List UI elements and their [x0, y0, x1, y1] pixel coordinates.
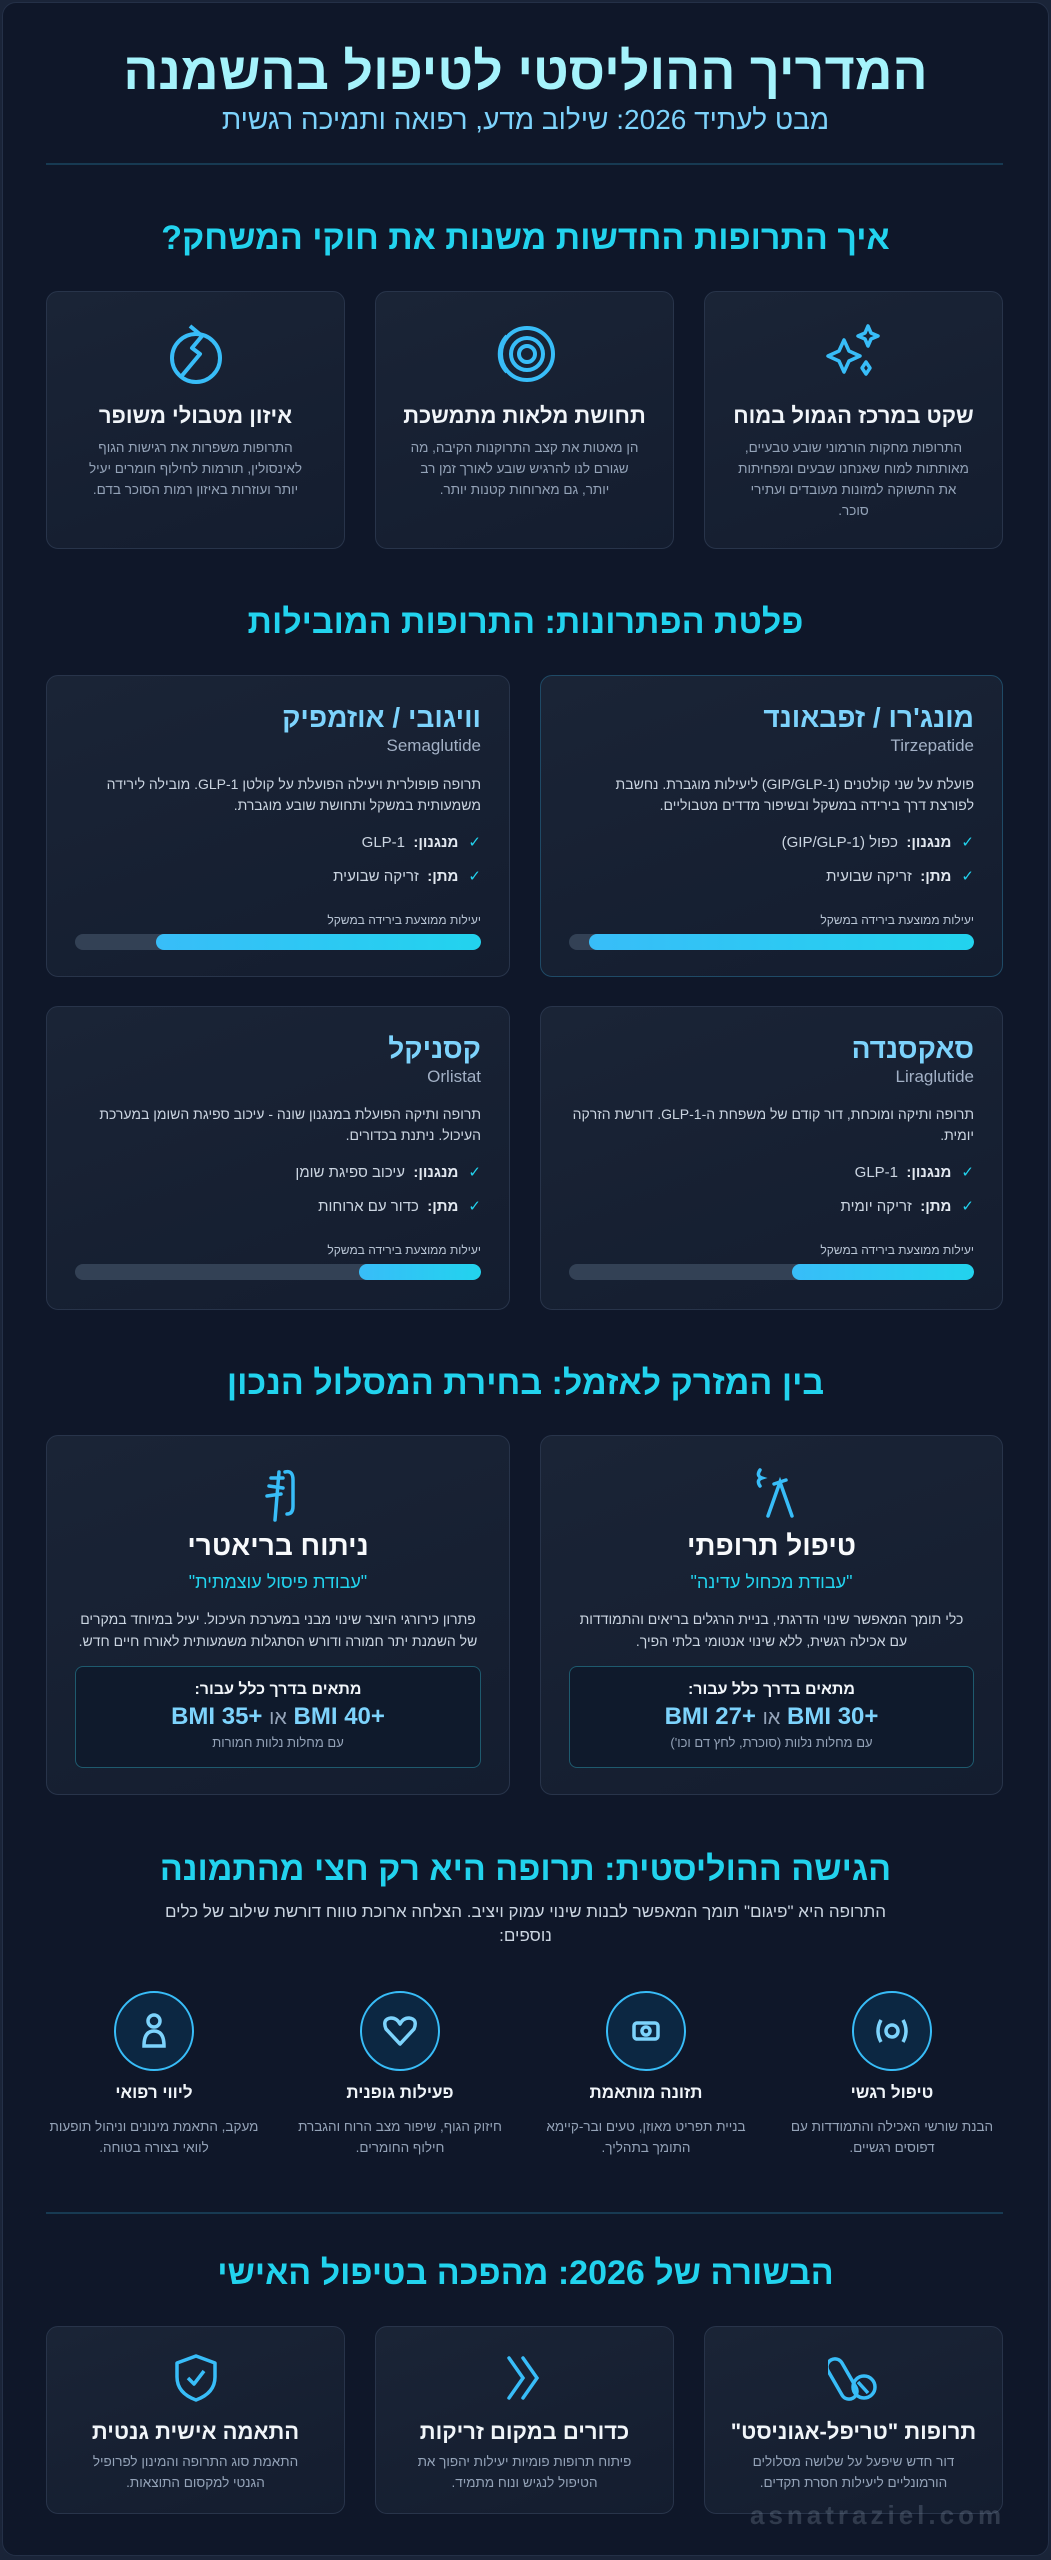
- drug card: Tirzepatide: Tirzepatide: [891, 736, 974, 755]
- drug card: Tirzepatide: [540, 675, 1003, 977]
- drug card: Tirzepatide: ✓מתן: זריקה שבועית: [826, 868, 974, 885]
- card: satiety: הן מאטות את קצב התרוקנות הקיבה, מה שגורם לנו להרגיש שובע לאורך זמן רב יותר, גם מארוחות קטנות יותר.: [411, 440, 638, 497]
- text block: intro: התרופה היא "פיגום" תומך המאפשר לבנות שינוי עמוק ויציב. הצלחה ארוכת טווח דורשת שילוב של כלים נוספים:: [165, 1902, 886, 1945]
- card: genetic personalization: התאמה אישית גנטית: [92, 2419, 299, 2444]
- callout: BMI box: מתאים בדרך כלל עבור:: [194, 1681, 362, 1698]
- card: satiety: תחושת מלאות מתמשכת: [403, 403, 646, 428]
- drug card: Semaglutide: יעילות ממוצעת בירידה במשקל: [327, 913, 481, 927]
- pillar: emotional therapy: הבנת שורשי האכילה והתמודדות עם דפוסים רגשיים.: [791, 2119, 993, 2155]
- pillar: nutrition: [546, 1991, 746, 2155]
- card: reward center: [704, 291, 1003, 549]
- drug card: Liraglutide: תרופה ותיקה ומוכחת, דור קודם של משפחת ה-GLP-1. דורשת הזרקה יומית.: [573, 1106, 974, 1143]
- bar: efficacy 95%: [569, 934, 974, 950]
- heading: holistic approach: הגישה ההוליסטית: תרופה היא רק חצי מהתמונה: [160, 1850, 891, 1888]
- drug card: Liraglutide: ✓מתן: זריקה יומית: [841, 1198, 974, 1215]
- card: drug treatment: כלי תומך המאפשר שינוי הדרגתי, בניית הרגלים בריאים והתמודדות עם אכילה רגשית, ללא שינוי אנטומי בלתי הפיך.: [580, 1611, 963, 1649]
- card: pills instead of injections: כדורים במקום זריקות: [420, 2419, 629, 2444]
- panel: treatment paths: [46, 1435, 1003, 1795]
- panel: future cards: [46, 2326, 1003, 2514]
- card: drug treatment: "עבודת מכחול עדינה": [690, 1572, 852, 1592]
- callout: BMI box: [75, 1666, 481, 1768]
- callout: BMI box: עם מחלות נלוות (סוכרת, לחץ דם וכו'): [670, 1735, 873, 1750]
- card: metabolic balance: איזון מטבולי משופר: [99, 403, 292, 428]
- callout: BMI box: BMI 40+ או BMI 35+: [171, 1703, 385, 1730]
- panel: drug cards: [46, 675, 1003, 1310]
- callout: BMI box: BMI 30+ או BMI 27+: [665, 1703, 878, 1730]
- pillar: physical activity: פעילות גופנית: [346, 2083, 454, 2102]
- drug card: Tirzepatide: פועלת על שני קולטנים (GIP/GLP-1) ליעילות מוגברת. נחשבת לפורצת דרך בירידה במשקל ובשיפור מדדים מטבוליים.: [616, 776, 974, 813]
- icon: syringe: [756, 1468, 794, 1518]
- title: המדריך ההוליסטי לטיפול בהשמנה: [123, 43, 928, 101]
- card: genetic personalization: התאמת סוג התרופה והמינון לפרופיל הגנטי למקסום התוצאות.: [93, 2454, 298, 2490]
- watermark: asnatraziel.com: [750, 2500, 1005, 2530]
- drug card: Orlistat: יעילות ממוצעת בירידה במשקל: [327, 1243, 481, 1257]
- icon: scalpel: [265, 1470, 295, 1522]
- icon: sparkles: [826, 324, 880, 376]
- callout: BMI box: [569, 1666, 974, 1768]
- card: genetic personalization: [46, 2326, 345, 2514]
- drug card: Liraglutide: יעילות ממוצעת בירידה במשקל: [820, 1243, 974, 1257]
- card: bariatric surgery: ניתוח בריאטרי: [187, 1530, 369, 1561]
- card: reward center: התרופות מחקות הורמוני שובע טבעיים, מאותתות למוח שאנחנו שבעים ומפחיתות את התשוקה למזונות מעובדים ועתירי סוכר.: [738, 440, 969, 518]
- pillar: medical follow-up: מעקב, התאמת מינונים וניהול תופעות לוואי בצורה בטוחה.: [50, 2119, 258, 2155]
- drug card: Semaglutide: ✓מתן: זריקה שבועית: [333, 868, 481, 885]
- callout: BMI box: מתאים בדרך כלל עבור:: [688, 1681, 855, 1698]
- drug card: Tirzepatide: מונג'רו / זפבאונד: [763, 702, 974, 733]
- card: triple agonist: תרופות "טריפל-אגוניסט": [731, 2419, 976, 2444]
- bar: efficacy 30%: [75, 1264, 481, 1280]
- card: drug treatment: [540, 1435, 1003, 1795]
- panel: three mechanism cards: [46, 291, 1003, 549]
- drug card: Tirzepatide: ✓מנגנון: כפול (GIP/GLP-1): [782, 834, 974, 851]
- pillar: nutrition: בניית תפריט מאוזן, טעים ובר-קיימא התומך בתהליך.: [546, 2119, 746, 2155]
- panel: holistic pillars: [50, 1991, 993, 2155]
- heading: leading drugs: פלטת הפתרונות: התרופות המובילות: [248, 603, 803, 641]
- bar: efficacy 45%: [569, 1264, 974, 1280]
- drug card: Liraglutide: [540, 1006, 1003, 1310]
- drug card: Orlistat: ✓מנגנון: עיכוב ספיגת שומן: [295, 1164, 481, 1181]
- drug card: Semaglutide: [46, 675, 510, 977]
- drug card: Orlistat: Orlistat: [427, 1067, 481, 1086]
- pillar: nutrition: תזונה מותאמת: [590, 2083, 702, 2102]
- heading: 2026 news: הבשורה של 2026: מהפכה בטיפול האישי: [217, 2254, 834, 2292]
- drug card: Liraglutide: Liraglutide: [896, 1067, 974, 1086]
- pillar: emotional therapy: [791, 1991, 993, 2155]
- drug card: Semaglutide: וויגובי / אוזמפיק: [282, 702, 481, 733]
- icon: double chevron: [507, 2356, 540, 2400]
- card: bariatric surgery: פתרון כירורגי היוצר שינוי מבני במערכת העיכול. יעיל במיוחד במקרים של השמנת יתר חמורה ודורש הסתגלות משמעותית לאורח חיים חדש.: [79, 1611, 477, 1649]
- bar: efficacy 80%: [75, 934, 481, 950]
- pillar: physical activity: [298, 1991, 502, 2155]
- drug card: Semaglutide: תרופה פופולרית ויעילה הפועלת על קולטן GLP-1. מובילה לירידה משמעותית במשקל ותחושת שובע מוגברת.: [107, 776, 481, 813]
- icon: shield check: [175, 2354, 217, 2402]
- icon: pill capsule: [828, 2357, 877, 2401]
- pillar: medical follow-up: [50, 1991, 258, 2155]
- heading: syringe vs scalpel: בין המזרק לאזמל: בחירת המסלול הנכון: [227, 1364, 824, 1402]
- drug card: Liraglutide: סאקסנדה: [852, 1033, 974, 1064]
- card: triple agonist: דור חדש שיפעל על שלושה מסלולים הורמונליים ליעילות חסרת תקדים.: [753, 2454, 954, 2490]
- card: drug treatment: טיפול תרופתי: [687, 1530, 856, 1561]
- pillar: physical activity: חיזוק הגוף, שיפור מצב הרוח והגברת חילוף החומרים.: [298, 2119, 502, 2155]
- drug card: Semaglutide: ✓מנגנון: GLP-1: [362, 834, 481, 851]
- drug card: Tirzepatide: יעילות ממוצעת בירידה במשקל: [820, 913, 974, 927]
- drug card: Orlistat: תרופה ותיקה הפועלת במנגנון שונה - עיכוב ספיגת השומן במערכת העיכול. ניתנת בכדורים.: [99, 1106, 481, 1143]
- pillar: medical follow-up: ליווי רפואי: [115, 2083, 193, 2102]
- heading: how drugs change the rules: איך התרופות החדשות משנות את חוקי המשחק?: [161, 219, 890, 257]
- drug card: Orlistat: קסניקל: [388, 1033, 481, 1064]
- card: pills instead of injections: [375, 2326, 674, 2514]
- card: reward center: שקט במרכז הגמול במוח: [733, 403, 974, 428]
- subtitle: מבט לעתיד 2026: שילוב מדע, רפואה ותמיכה רגשית: [222, 104, 829, 135]
- card: satiety: [375, 291, 674, 549]
- card: metabolic balance: התרופות משפרות את רגישות הגוף לאינסולין, תורמות לחילוף חומרים יעיל יותר ועוזרות באיזון רמות הסוכר בדם.: [89, 440, 302, 497]
- card: metabolic balance: [46, 291, 345, 549]
- drug card: Semaglutide: Semaglutide: [386, 736, 481, 755]
- pillar: emotional therapy: טיפול רגשי: [851, 2083, 933, 2102]
- card: bariatric surgery: [46, 1435, 510, 1795]
- drug card: Orlistat: ✓מתן: כדור עם ארוחות: [318, 1198, 481, 1215]
- drug card: Liraglutide: ✓מנגנון: GLP-1: [855, 1164, 974, 1181]
- card: bariatric surgery: "עבודת פיסול עוצמתית": [189, 1572, 367, 1592]
- icon: leaf/bolt circle: [170, 324, 222, 384]
- card: pills instead of injections: פיתוח תרופות פומיות יעילות יהפוך את הטיפול לנגיש ונוח מתמיד.: [418, 2454, 631, 2490]
- callout: BMI box: עם מחלות נלוות חמורות: [212, 1735, 344, 1750]
- icon: concentric rings: [498, 326, 555, 382]
- drug card: Orlistat: [46, 1006, 510, 1310]
- card: triple agonist: [704, 2326, 1003, 2514]
